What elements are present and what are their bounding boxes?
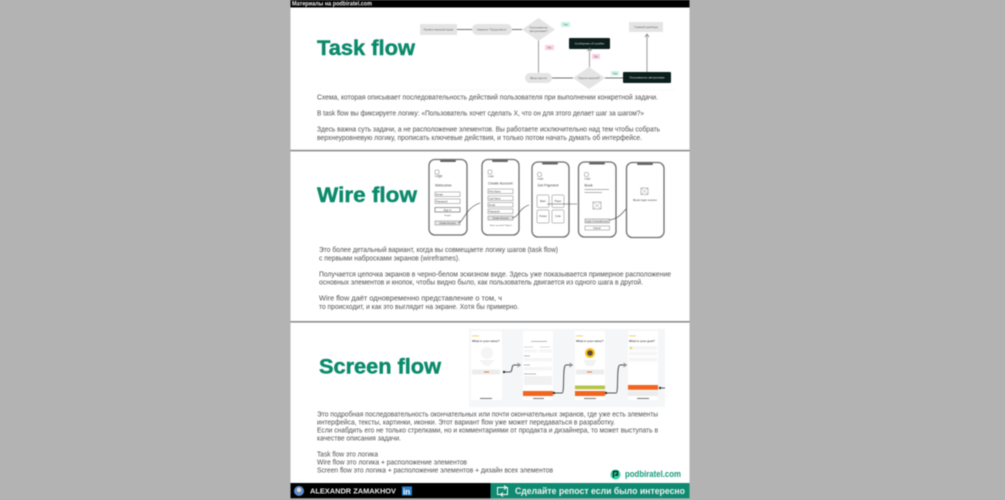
- flowchart: Пользователь: [529, 26, 548, 30]
- task flow description: верхнеуровневую логику, прописать ключевые действия, и только потом начать думать об интерфейсе.: [317, 133, 642, 142]
- wireframe phone 2: Create Account: [488, 182, 513, 186]
- wireframe phone 1: Sign in: [444, 208, 452, 212]
- screen flow description: Если снабдить его не только стрелками, но и комментариями от продакта и дизайнера, то может выступать в: [317, 426, 658, 434]
- task flow description: [317, 92, 660, 142]
- wire flow description: Wire flow даёт одновременно представление о том, ч: [319, 294, 502, 302]
- task flow description: В task flow вы фиксируете логику: «Пользователь хочет сделать X, что он для этого делает шаг за шагом?»: [317, 108, 644, 118]
- logo: podbiratel.com: podbiratel.com: [625, 469, 681, 479]
- panel: task flow: [317, 18, 675, 142]
- screen flow description: качестве описания задачи.: [317, 434, 401, 442]
- screen 3: [575, 331, 605, 400]
- panel: screen flow: [317, 329, 665, 474]
- wire flow description: Это более детальный вариант, когда вы совмещаете логику шагов (task flow): [319, 245, 558, 254]
- footer: author: ALEXANDR ZAMAKHOV: [310, 486, 396, 496]
- wireframe phone 1: Create Account: [439, 222, 456, 225]
- wireframe phone 3: Logo: [538, 176, 544, 180]
- wireframe phone 4: [578, 162, 616, 237]
- wire flow description: [319, 245, 671, 311]
- top header bar: Материалы на podbiratel.com: [292, 2, 372, 8]
- wireframe phone 2: [482, 160, 519, 235]
- footer: repost call to action: [490, 483, 690, 498]
- wireframe phone 5: Book login screen: [633, 198, 657, 202]
- screen flow description: Screen flow это логика + расположение элементов + дизайн всех элементов: [317, 466, 553, 474]
- wireframe phone 3: Basic: [540, 200, 547, 203]
- screen flow description: [317, 410, 658, 474]
- flowchart: [418, 18, 675, 90]
- wireframe phone 4: Login / Create Account: [586, 220, 608, 223]
- heading: screen flow: Screen flow: [319, 356, 442, 378]
- wireframe phone 5: [626, 162, 664, 238]
- wireframe phone 3: Player: [555, 200, 562, 203]
- wireframe phone 4: Cancel: [593, 227, 601, 230]
- wireframe phone 2: First Name: [489, 190, 501, 193]
- wireframe phone 2: Email: [489, 204, 495, 207]
- wireframe phone 1: Email: [436, 192, 443, 196]
- wire flow description: с первыми набросками экранов (wireframes).: [319, 254, 460, 262]
- screen 1: What is your name?: [472, 339, 500, 343]
- panel: wire flow: [317, 160, 671, 311]
- wireframe phone 2: Create Account: [492, 217, 509, 220]
- wireframe phone 3: Code: [555, 215, 562, 218]
- icon: avatar: [294, 486, 304, 496]
- screen flow description: Это подробная последовательность окончательных или почти окончательных экранов, где уже есть элементы: [317, 410, 658, 418]
- screen 4: [628, 331, 658, 400]
- wireframe phone 1: [429, 160, 467, 235]
- flowchart: Сообщение об ошибке: [575, 42, 605, 46]
- wireframe phone 4: Logo: [584, 176, 591, 180]
- wireframe phone 1: Logo: [435, 174, 443, 178]
- icon: linkedin: [402, 486, 412, 496]
- wireframe phone 3: [532, 162, 569, 237]
- screen 2: [523, 331, 553, 400]
- flowchart: Yes: [613, 71, 618, 75]
- top header bar: [290, 0, 690, 8]
- flowchart: Пользователь авторизован: [629, 76, 665, 80]
- wireframe phone 3: Pocket: [539, 215, 547, 218]
- flowchart: Пароль верный?: [578, 76, 600, 80]
- wireframe phone 2: Have account? Sign in: [490, 224, 513, 227]
- heading: wire flow: Wire flow: [317, 184, 418, 207]
- screen flow mockups: [469, 329, 665, 407]
- screen flow description: Wire flow это логика + расположение элементов: [317, 458, 467, 466]
- screen 3: What is your name?: [576, 339, 604, 343]
- screen 1: [471, 331, 502, 400]
- screen flow arrows: [503, 363, 665, 394]
- flowchart: авторизован?: [530, 29, 548, 33]
- wire flow description: то происходит, и как это выглядит на экране. Хотя бы примерно.: [319, 302, 519, 311]
- task flow description: Схема, которая описывает последовательность действий пользователя при выполнении конкретной задачи.: [317, 92, 658, 102]
- screen flow description: интерфейса, тексты, картинки, иконки. Этот вариант flow уже может передаваться в разработку.: [317, 418, 615, 426]
- flowchart: No: [594, 54, 598, 58]
- task flow description: Здесь важна суть задачи, а не расположение элементов. Вы работаете исключительно над тем чтобы собрать: [317, 124, 660, 134]
- flowchart: No: [548, 46, 552, 50]
- flowchart: Yes: [563, 22, 568, 26]
- flowchart: Главный дашборд: [634, 25, 658, 29]
- wireframe phone 1: Password: [436, 199, 448, 203]
- heading: task flow: Task flow: [317, 37, 416, 60]
- wire flow description: основных элементов и кнопок, чтобы видно было, как пользователь двигается из одного шага в другой.: [319, 278, 643, 286]
- flowchart: Приветственный экран: [424, 28, 454, 32]
- logo: podbiratel.com: [610, 469, 681, 480]
- flowchart: Нажатие "Продолжить": [477, 28, 507, 32]
- flowchart: Ввод пароля: [530, 76, 547, 80]
- screen 4: What is your goal?: [629, 339, 655, 343]
- wireframe phone 4: Book: [584, 184, 593, 188]
- wireframe arrows: [458, 203, 626, 223]
- wireframe phone 3: Get Payment: [538, 184, 558, 188]
- wireframe phone 1: Forgot: [444, 214, 451, 217]
- icon: repost: [498, 486, 508, 496]
- wireframe phone 2: Logo: [488, 174, 494, 178]
- wireframe phone 2: Password: [489, 210, 500, 213]
- wire flow description: Получается цепочка экранов в черно-белом эскизном виде. Здесь уже показывается примерное расположение: [319, 270, 671, 278]
- screen flow description: Task flow это логика: [317, 450, 379, 458]
- wireframe phone 2: Last Name: [489, 197, 501, 200]
- footer: repost call to action: Сделайте репост если было интересно: [515, 486, 685, 496]
- icon: linkedin: in: [403, 488, 410, 496]
- footer: author: [290, 483, 490, 498]
- wireframe phone 1: Welcome: [435, 182, 452, 188]
